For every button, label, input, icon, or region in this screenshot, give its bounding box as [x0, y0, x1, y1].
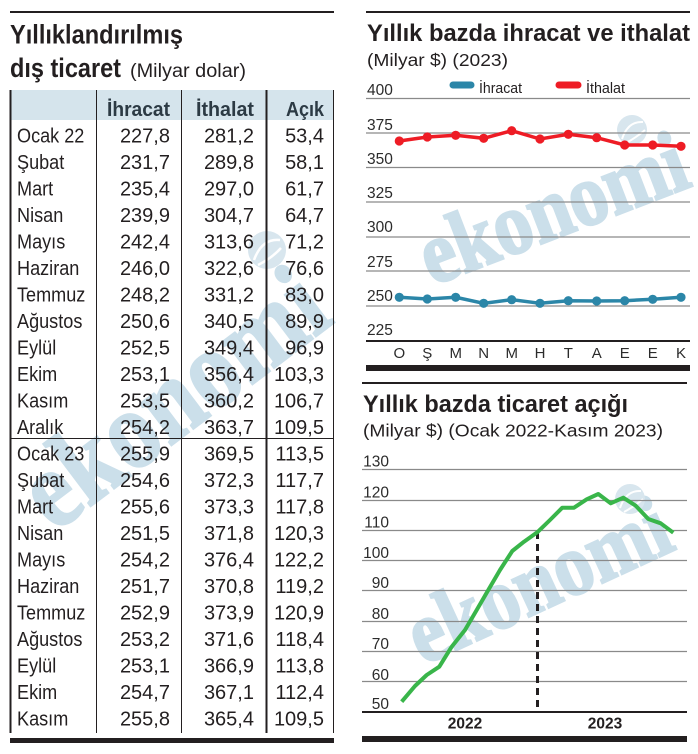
rule: top — [366, 11, 690, 13]
row: Ocak 23: 255,9 — [120, 443, 170, 465]
row: Ağustos 23: 253,2 — [120, 629, 170, 651]
x axis month labels — [393, 345, 686, 362]
row: Ocak 23: 369,5 — [204, 443, 254, 465]
gridlines — [362, 470, 687, 682]
row: Ocak 22 — [17, 125, 324, 148]
row: Ekim: 356,4 — [204, 364, 254, 386]
y axis labels: 70 — [372, 636, 389, 653]
y axis labels: 325 — [367, 185, 393, 202]
row: Mart: 235,4 — [120, 178, 170, 200]
panel: annual exports and imports chart — [366, 11, 698, 371]
row: Mayıs — [17, 231, 324, 254]
row: Ağustos: Ağustos — [17, 311, 82, 333]
row: Nisan: 239,9 — [120, 205, 170, 227]
row: Ağustos: 340,5 — [204, 311, 254, 333]
row: Kasım: Kasım — [17, 391, 68, 413]
row: Nisan 23: Nisan — [17, 523, 63, 545]
row: Ağustos 23: 118,4 — [275, 629, 324, 651]
table column headers: İhracat — [107, 98, 170, 121]
legend: İthalat — [586, 79, 625, 97]
row: Ağustos: 250,6 — [120, 311, 170, 333]
gridlines — [366, 98, 690, 306]
row: Şubat — [17, 152, 324, 174]
row: Ağustos: 89,9 — [285, 311, 324, 333]
row: Mart 23: Mart — [17, 497, 54, 519]
line series: imports — [395, 126, 686, 151]
table column headers: İthalat — [196, 98, 254, 121]
row: Temmuz 23: Temmuz — [17, 603, 85, 625]
row: Eylül: 349,4 — [204, 337, 254, 359]
row: Şubat 23: Şubat — [17, 470, 65, 492]
legend: İhracat — [479, 79, 522, 97]
x axis year labels: 2022 — [448, 716, 482, 732]
x axis month labels: K — [676, 345, 686, 362]
row: Temmuz — [17, 284, 324, 307]
row: Mayıs: Mayıs — [17, 232, 65, 254]
y axis labels: 100 — [363, 545, 389, 562]
y axis labels: 225 — [367, 322, 393, 339]
row: Şubat 23: 254,6 — [120, 470, 170, 492]
title: exports and imports: Yıllık bazda ihracat ve ithalat — [367, 20, 690, 47]
row: Ocak 23: Ocak 23 — [17, 444, 84, 466]
line series: trade deficit — [402, 494, 673, 702]
row: Haziran: 76,6 — [285, 258, 324, 280]
row: Haziran 23: 119,2 — [275, 576, 324, 598]
row: Mart 23: 255,6 — [120, 496, 170, 518]
row: Ekim 23: 367,1 — [204, 682, 254, 704]
x axis month labels: E — [620, 345, 630, 362]
table header background — [10, 90, 334, 120]
x axis month labels: M — [505, 345, 518, 362]
y axis labels: 250 — [367, 288, 393, 305]
row: Haziran 23: 370,8 — [204, 576, 254, 598]
watermark: ekonomi left: ekonomi — [0, 242, 350, 553]
row: Nisan 23: 371,8 — [204, 523, 254, 545]
title: trade deficit: Yıllık bazda ticaret açığı — [363, 391, 628, 418]
line series: exports — [395, 293, 686, 308]
y axis labels — [367, 82, 393, 339]
row: Temmuz: Temmuz — [17, 285, 85, 307]
row: Kasım 23: Kasım — [17, 709, 68, 731]
y axis labels: 60 — [372, 667, 389, 684]
table rows — [17, 125, 324, 731]
y axis labels: 50 — [372, 696, 389, 713]
row: Haziran 23: 251,7 — [120, 576, 170, 598]
x axis month labels: N — [478, 345, 489, 362]
x axis year labels — [448, 716, 623, 732]
x axis line — [362, 711, 687, 713]
row: Temmuz: 83,0 — [285, 284, 324, 306]
row: Nisan: 304,7 — [204, 205, 254, 227]
row: Şubat: 289,8 — [204, 152, 254, 174]
row: Mart 23: 117,8 — [275, 496, 324, 518]
y axis labels: 350 — [367, 151, 393, 168]
row: Haziran: 246,0 — [120, 258, 170, 280]
x axis year labels: 2023 — [588, 716, 623, 732]
row: Ocak 22: 227,8 — [120, 125, 170, 147]
row: Nisan 23: 251,5 — [120, 523, 170, 545]
y axis labels: 400 — [367, 82, 393, 99]
row: Haziran: Haziran — [17, 258, 79, 280]
row: Ocak 22: 281,2 — [204, 125, 254, 147]
row: Mart: 297,0 — [204, 178, 254, 200]
row: Nisan 23: 120,3 — [274, 523, 324, 545]
row: Temmuz: 331,2 — [204, 284, 254, 306]
row: Eylül 23 — [17, 655, 324, 678]
x axis month labels: O — [393, 345, 405, 362]
y axis labels: 80 — [372, 606, 389, 623]
subtitle: unit and year: (Milyar $) (2023) — [367, 50, 508, 70]
row: Eylül — [17, 337, 324, 360]
row: Haziran: 322,6 — [204, 258, 254, 280]
rule: top — [362, 382, 687, 384]
row: Nisan: 64,7 — [285, 205, 324, 227]
row: Eylül 23: Eylül — [17, 656, 56, 678]
row: Kasım 23: 109,5 — [274, 708, 324, 730]
y axis labels: 130 — [363, 454, 389, 470]
row: Mart 23 — [17, 496, 324, 519]
row: Aralık — [17, 417, 324, 439]
row: Şubat 23: 372,3 — [204, 470, 254, 492]
bottom bar — [362, 736, 687, 742]
row: Ağustos — [17, 311, 324, 333]
row: Ocak 23: 113,5 — [275, 443, 324, 465]
row: Kasım 23: 255,8 — [120, 708, 170, 730]
row: Ocak 22: Ocak 22 — [17, 126, 84, 148]
row: Kasım 23 — [17, 708, 324, 731]
row: Eylül 23: 253,1 — [120, 655, 170, 677]
row: Şubat: Şubat — [17, 152, 65, 174]
title: table: Yıllıklandırılmış — [10, 20, 183, 50]
y axis labels: 375 — [367, 117, 393, 134]
row: Şubat 23: 117,7 — [275, 470, 324, 492]
row: Mart: Mart — [17, 179, 54, 201]
table column headers — [107, 98, 325, 121]
row: Mayıs 23: Mayıs — [17, 550, 65, 572]
row: Şubat 23 — [17, 470, 324, 492]
row: Eylül: 96,9 — [285, 337, 324, 359]
row: Nisan 23 — [17, 523, 324, 545]
row: Haziran — [17, 258, 324, 280]
row: Mart — [17, 178, 324, 201]
row: Temmuz 23 — [17, 602, 324, 625]
row: Ekim 23 — [17, 682, 324, 704]
y axis labels: 110 — [364, 514, 389, 532]
row: Ağustos 23: 371,6 — [204, 629, 254, 651]
x axis month labels: M — [449, 345, 462, 362]
row: Haziran 23: Haziran — [17, 576, 79, 598]
panel: annual foreign trade table — [0, 11, 350, 743]
row: Mayıs: 313,6 — [204, 231, 254, 253]
legend — [453, 79, 625, 97]
row: Temmuz 23: 120,9 — [274, 602, 324, 624]
row: Kasım 23: 365,4 — [204, 708, 254, 730]
row: Mayıs: 71,2 — [285, 231, 324, 253]
row: Kasım: 360,2 — [204, 390, 254, 412]
row: Mart 23: 373,3 — [204, 496, 254, 518]
row: Temmuz: 248,2 — [120, 284, 170, 306]
row: Eylül: Eylül — [17, 338, 56, 360]
x axis month labels: T — [564, 345, 573, 362]
y axis labels — [363, 454, 389, 713]
title: table: (Milyar dolar) — [130, 61, 246, 82]
x axis month labels: A — [592, 345, 602, 362]
table grid lines — [10, 90, 334, 733]
row: Mayıs: 242,4 — [120, 231, 170, 253]
row: Eylül 23: 113,8 — [275, 655, 324, 677]
row: Mayıs 23: 122,2 — [274, 549, 324, 571]
y axis labels: 300 — [367, 219, 393, 236]
dashed year divider — [536, 532, 539, 711]
y axis labels: 120 — [363, 484, 389, 502]
row: Mayıs 23: 376,4 — [204, 549, 254, 571]
panel: annual trade deficit chart — [362, 382, 687, 742]
row: Şubat: 231,7 — [120, 152, 170, 174]
row: Ekim 23: Ekim — [17, 682, 57, 704]
row: Haziran 23 — [17, 576, 324, 598]
row: Kasım — [17, 390, 324, 413]
bottom bar — [366, 365, 690, 371]
row: Ekim: 103,3 — [274, 364, 324, 386]
row: Nisan: Nisan — [17, 205, 63, 227]
row: Temmuz 23: 252,9 — [120, 602, 170, 624]
row: Aralık: 363,7 — [204, 417, 254, 439]
rule: top — [10, 11, 334, 13]
row: Ekim — [17, 364, 324, 386]
row: Eylül 23: 366,9 — [204, 655, 254, 677]
row: Aralık: 254,2 — [120, 417, 170, 439]
subtitle: unit and period: (Milyar $) (Ocak 2022-Kasım 2023) — [363, 420, 663, 440]
x axis line — [366, 340, 690, 342]
row: Ağustos 23 — [17, 629, 324, 651]
row: Mart: 61,7 — [285, 178, 324, 200]
row: Aralık: Aralık — [17, 417, 64, 439]
row: Kasım: 106,7 — [274, 390, 324, 412]
title: table — [10, 20, 246, 83]
row: Eylül: 252,5 — [120, 337, 170, 359]
row: Mayıs 23 — [17, 549, 324, 572]
row: Ekim: 253,1 — [120, 364, 170, 386]
y axis labels: 90 — [372, 575, 389, 592]
table bottom bar — [10, 738, 334, 743]
row: Temmuz 23: 373,9 — [204, 602, 254, 624]
row: Ekim 23: 112,4 — [275, 682, 324, 704]
row: Ağustos 23: Ağustos — [17, 629, 82, 651]
row: Ekim: Ekim — [17, 364, 57, 386]
row: Ocak 23 — [17, 443, 324, 466]
x axis month labels: E — [648, 345, 658, 362]
x axis month labels: H — [535, 345, 545, 362]
row: Mayıs 23: 254,2 — [120, 549, 170, 571]
row: Kasım: 253,5 — [120, 390, 170, 412]
x axis month labels: Ş — [422, 345, 432, 362]
row: Şubat: 58,1 — [285, 152, 324, 174]
row: Aralık: 109,5 — [274, 417, 324, 439]
table column headers: Açık — [286, 99, 325, 121]
row: Nisan — [17, 205, 324, 227]
row: Ekim 23: 254,7 — [120, 682, 170, 704]
y axis labels: 275 — [367, 254, 393, 271]
row: Ocak 22: 53,4 — [285, 125, 324, 147]
title: table: dış ticaret — [10, 53, 121, 83]
